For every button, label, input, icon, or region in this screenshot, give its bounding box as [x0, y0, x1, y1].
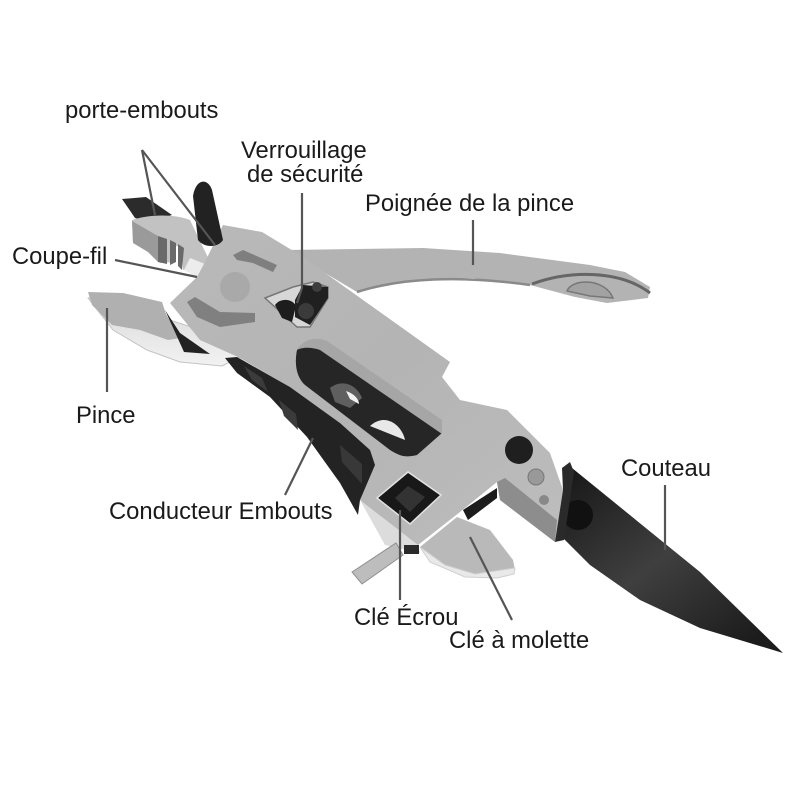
bit [193, 182, 223, 246]
leader lines [107, 150, 665, 620]
label: Poignée de la pince: Poignée de la pince [365, 190, 574, 217]
rivets [528, 469, 549, 505]
engraved marks [187, 250, 277, 327]
bit holder: dark bit [122, 197, 172, 222]
window slot [296, 339, 442, 456]
label: Pince: Pince [76, 402, 136, 429]
safety lock [265, 282, 328, 327]
label: Coupe-fil: Coupe-fil [12, 243, 107, 270]
key pin [352, 543, 419, 584]
lower plier jaw [88, 292, 240, 366]
label: Couteau: Couteau [621, 455, 711, 482]
label: porte-embouts: porte-embouts [65, 97, 219, 124]
nut wrench [377, 472, 441, 524]
label: Clé Écrou: Clé Écrou [354, 604, 458, 631]
adjustable wrench jaw [360, 500, 515, 578]
label: Conducteur Embouts: Conducteur Embouts [109, 498, 333, 525]
knife screw [563, 500, 593, 530]
upper plier jaw [132, 216, 212, 278]
rubber driver handle [225, 357, 375, 515]
knife blade [560, 468, 783, 653]
jaw slot detail [463, 478, 557, 542]
screw: pivot screw [505, 436, 533, 464]
label: Verrouillage de sécurité: Verrouillage [241, 137, 367, 164]
label: Clé à molette: Clé à molette [449, 627, 589, 654]
plier handle [287, 248, 650, 303]
tool: multi-tool illustration [88, 182, 783, 653]
main body [170, 225, 563, 545]
label: Verrouillage de sécurité: de sécurité [247, 161, 363, 188]
